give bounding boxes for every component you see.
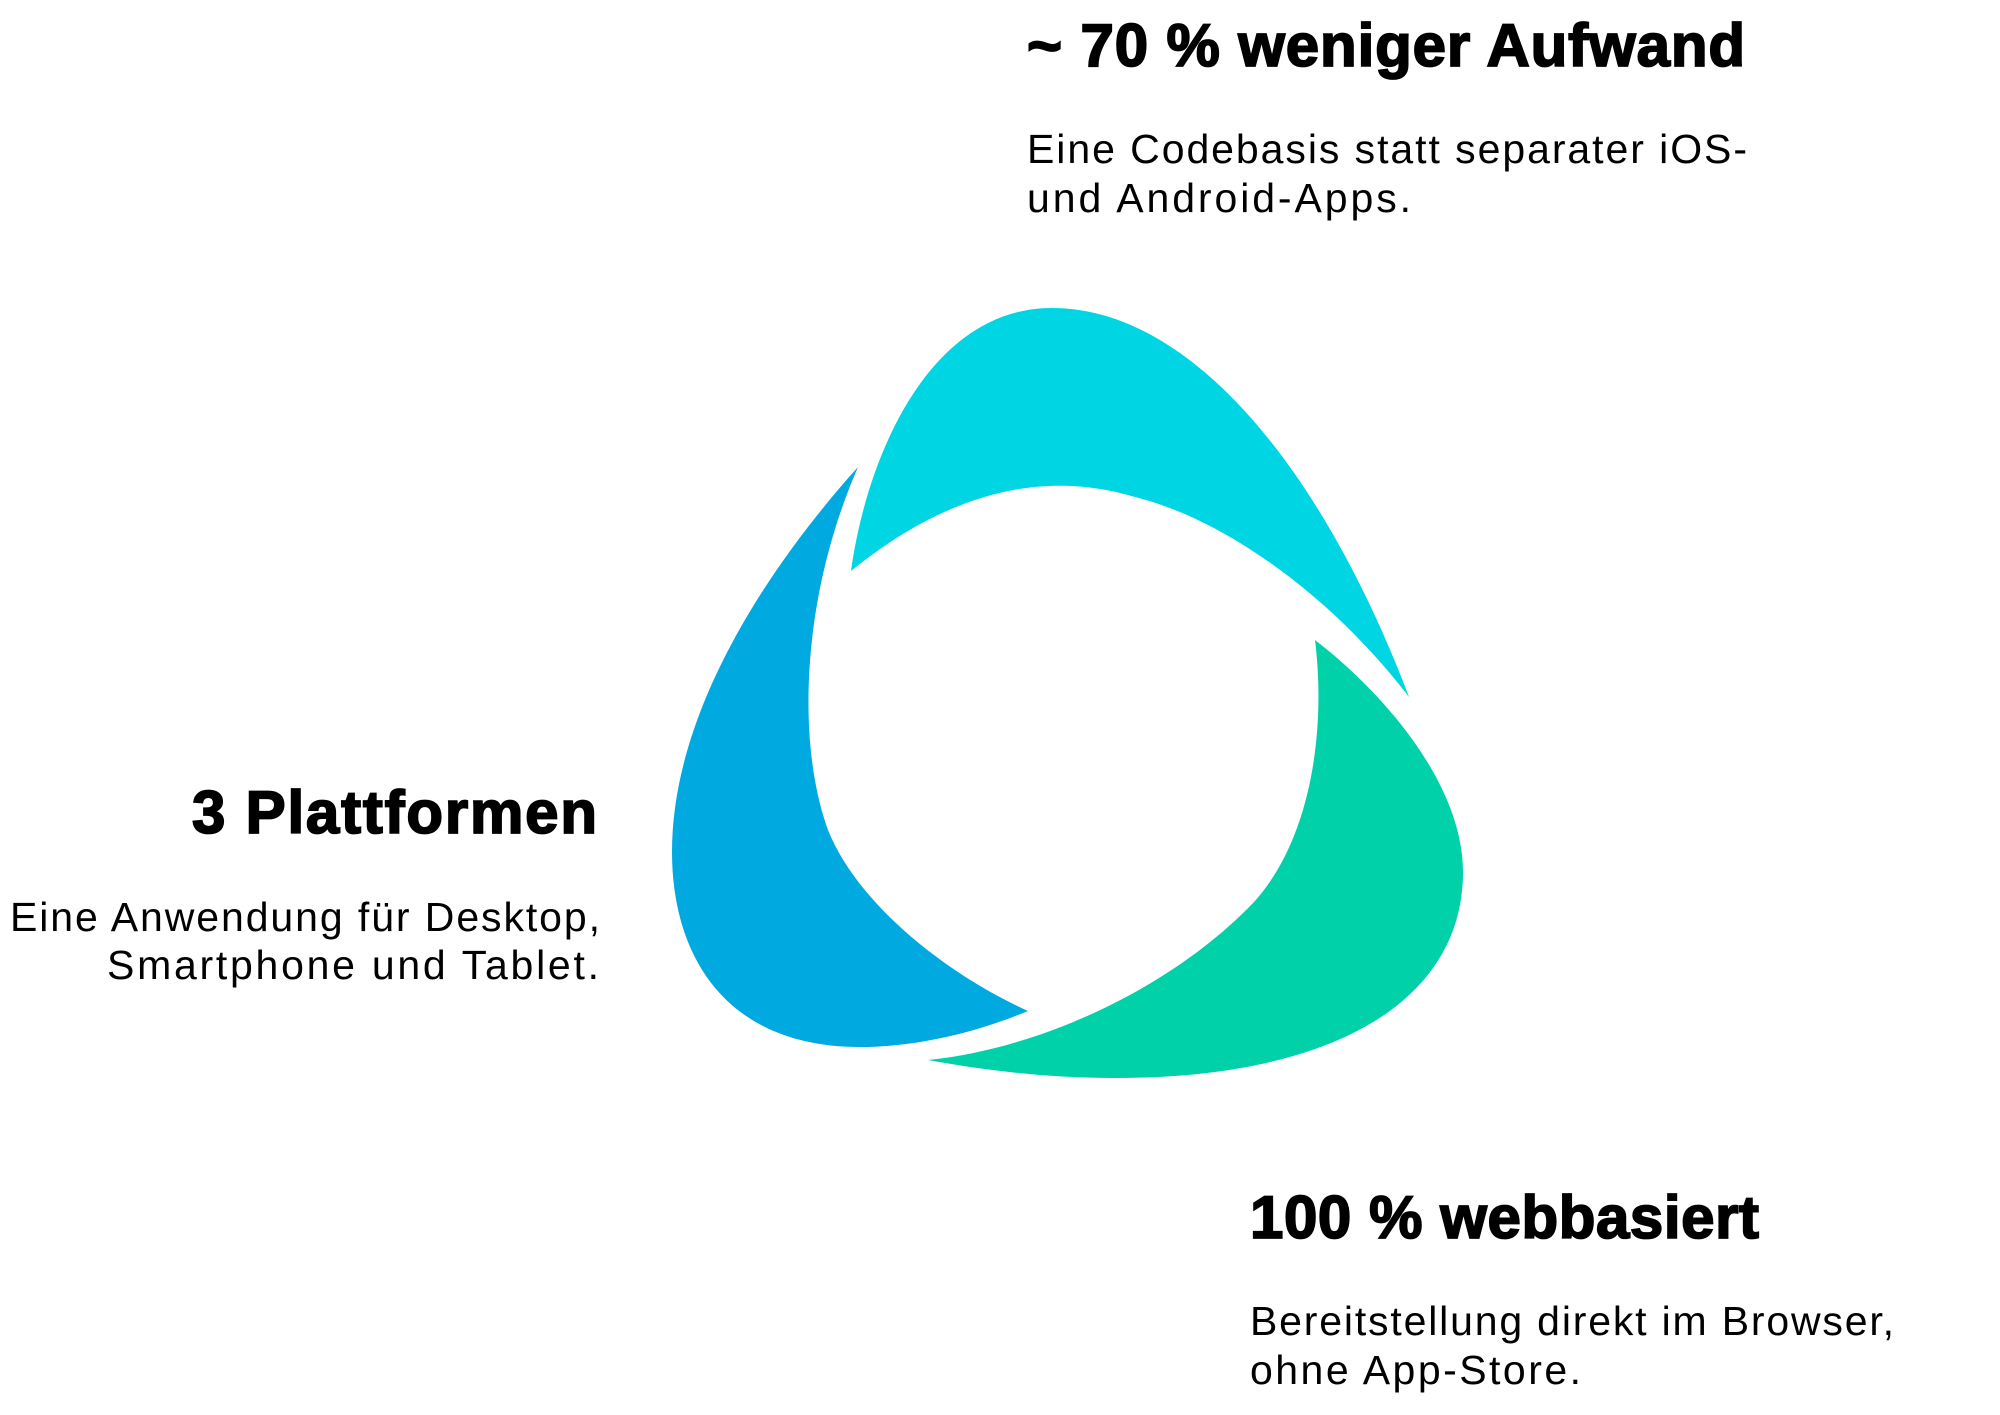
text block: platforms <box>10 779 600 988</box>
description: effort: Eine Codebasis statt separater iOS- <box>1027 126 1747 172</box>
text block: web based <box>1250 1184 1894 1393</box>
segment: bottom right green <box>928 640 1463 1078</box>
segment: left blue <box>672 467 1028 1047</box>
description: effort <box>1027 126 1747 221</box>
heading: platforms: 3 Plattformen <box>192 779 597 846</box>
description: web based <box>1250 1298 1894 1393</box>
text block: effort <box>1027 12 1747 221</box>
diagram: three-part ring <box>672 308 1463 1078</box>
segment: top cyan <box>851 308 1409 697</box>
description: platforms: Eine Anwendung für Desktop, <box>10 894 600 940</box>
heading: web based: 100 % webbasiert <box>1250 1184 1759 1251</box>
description: effort: und Android-Apps. <box>1027 175 1411 221</box>
heading: effort: ~ 70 % weniger Aufwand <box>1027 12 1745 79</box>
description: web based: Bereitstellung direkt im Browser, <box>1250 1298 1894 1344</box>
description: platforms <box>10 894 600 988</box>
description: web based: ohne App-Store. <box>1250 1347 1581 1393</box>
description: platforms: Smartphone und Tablet. <box>107 942 599 988</box>
